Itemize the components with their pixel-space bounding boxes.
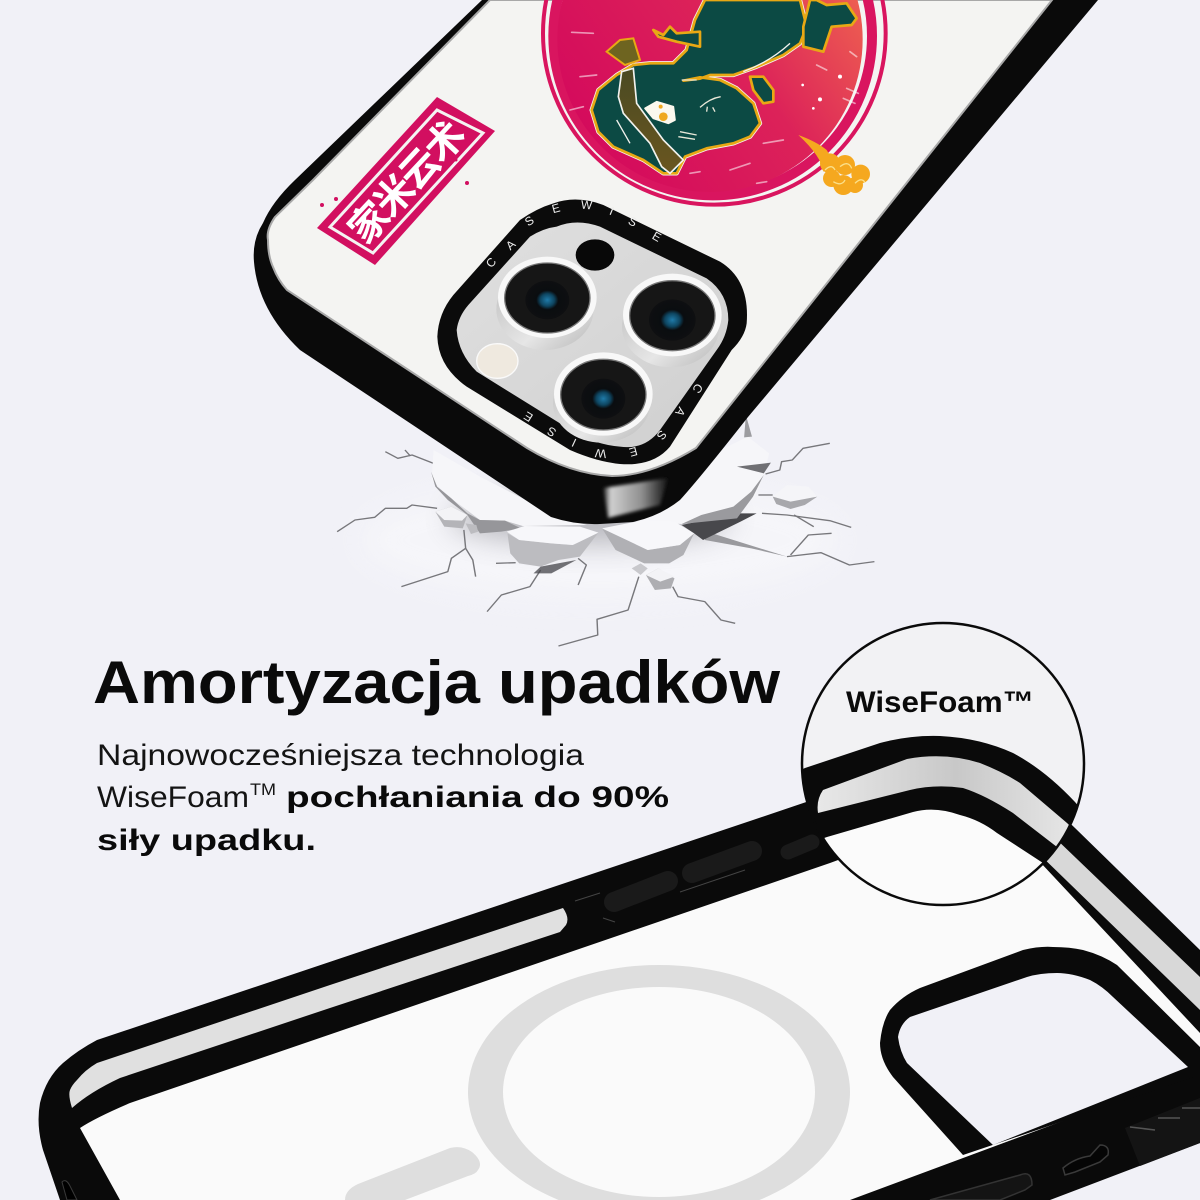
- case frame: [39, 749, 1200, 1200]
- lens 3: [553, 352, 653, 443]
- volume and side buttons: [575, 842, 812, 922]
- camera bumper: [437, 200, 747, 464]
- magnified foam: [818, 756, 1069, 846]
- camera ring lettering: C: [483, 255, 499, 271]
- camera ring lettering: I: [570, 436, 578, 450]
- title: Amortyzacja upadków: [93, 649, 780, 716]
- body text: siły upadku.: [97, 824, 316, 857]
- middle left chunk: [507, 533, 598, 567]
- creature face lines: [678, 80, 721, 139]
- camera ring lettering: E: [521, 409, 535, 425]
- artwork: red sun and creature: [543, 0, 886, 205]
- camera ring lettering: [483, 198, 706, 461]
- middle right chunk: [602, 528, 694, 563]
- bumper highlight: [603, 478, 668, 518]
- alignment pill: [345, 1147, 480, 1200]
- scarf: [607, 38, 640, 65]
- magnifier: WiseFoam detail: [800, 622, 1086, 906]
- lower edge gloss: [1125, 1098, 1200, 1166]
- foam strip left: [69, 908, 567, 1108]
- lower edge port: [1063, 1145, 1108, 1175]
- body text: TM: [250, 780, 276, 799]
- camera ring lettering: I: [607, 204, 616, 218]
- camera ring lettering: E: [650, 229, 664, 245]
- camera ring lettering: W: [580, 198, 594, 213]
- lens 2: [622, 274, 722, 367]
- small rocks: [435, 507, 467, 528]
- stamp: 家米云术: [341, 113, 475, 252]
- sun speckles: [570, 32, 858, 183]
- cracked ground impact: [337, 415, 874, 646]
- camera ring lettering: A: [672, 404, 688, 419]
- left plate: [432, 450, 587, 526]
- magnified outer band: [803, 736, 1077, 862]
- speaker slot: [62, 1181, 77, 1200]
- phone with printed case: [254, 0, 1098, 524]
- camera cutout frame: [880, 947, 1200, 1155]
- flash: [477, 344, 518, 378]
- camera plateau: [457, 222, 728, 447]
- camera ring lettering: S: [626, 214, 639, 230]
- lower edge button: [930, 1174, 1032, 1200]
- creature limbs: [803, 0, 857, 52]
- magnetic ring: [468, 965, 850, 1200]
- camera cutout opening: [898, 973, 1188, 1145]
- crack wedge: [705, 532, 787, 557]
- foam strip right: [1035, 835, 1200, 1010]
- clear case, back view: [39, 749, 1200, 1200]
- sun disc: [557, 0, 863, 192]
- camera module: [437, 198, 747, 464]
- body text: pochłaniania do 90%: [286, 781, 669, 814]
- lens 1: [496, 257, 597, 350]
- camera ring lettering: A: [503, 237, 518, 253]
- creature body: [592, 0, 807, 173]
- right plate: [616, 437, 769, 524]
- case back: [268, 0, 1052, 476]
- cloud: [798, 135, 870, 195]
- body text: Najnowocześniejsza technologia: [97, 739, 584, 772]
- magnifier label: WiseFoam™: [846, 686, 1034, 719]
- camera ring lettering: S: [654, 427, 670, 443]
- body text: [97, 739, 669, 857]
- sensor: [576, 239, 614, 271]
- body text: WiseFoam: [97, 781, 249, 814]
- case bumper: [254, 0, 1098, 524]
- stamp: [317, 97, 495, 265]
- camera ring lettering: E: [628, 444, 639, 459]
- sun rings: [543, 0, 886, 205]
- clear back: [80, 815, 1200, 1200]
- camera ring lettering: C: [689, 381, 706, 396]
- camera ring lettering: S: [522, 213, 537, 229]
- camera ring lettering: S: [545, 424, 559, 440]
- camera ring lettering: E: [550, 201, 562, 216]
- small bird: [645, 102, 675, 123]
- camera ring lettering: W: [594, 446, 607, 461]
- magnified clear area: [825, 810, 1042, 904]
